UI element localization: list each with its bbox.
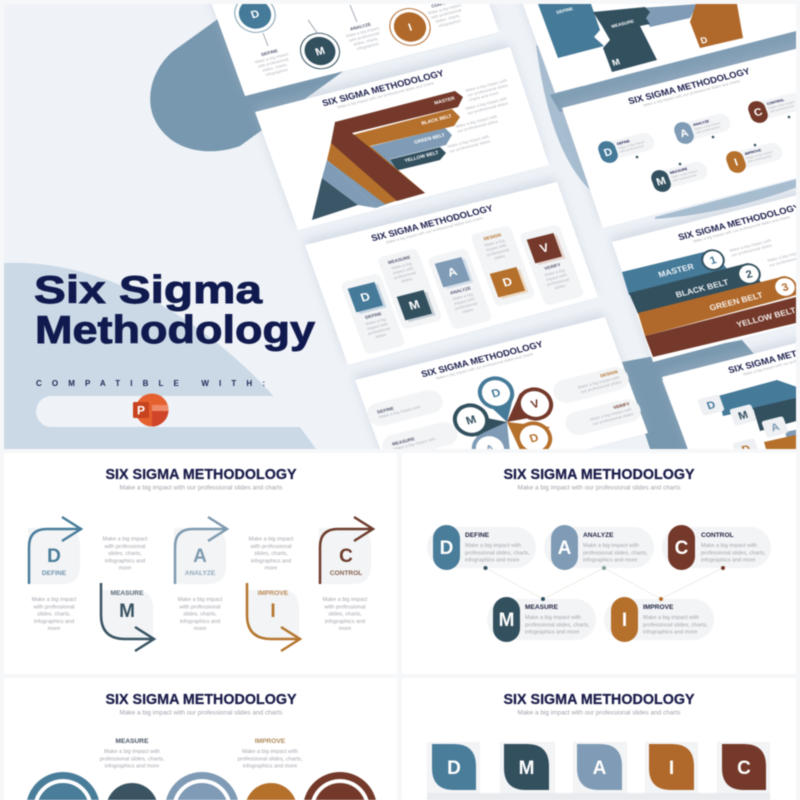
leaf C: C	[737, 758, 751, 779]
text blocks: with professional	[33, 604, 74, 610]
slide card: pyramid belts	[255, 47, 549, 230]
column design	[470, 225, 536, 307]
leaf D: D	[447, 758, 461, 779]
petal chart: A	[484, 443, 497, 456]
column V: Make a big	[544, 268, 565, 277]
belt labels: YELLOW BELT	[404, 150, 440, 164]
belt labels: BLACK BELT	[421, 113, 453, 127]
leaf D	[432, 744, 476, 790]
label: define	[254, 48, 289, 76]
steps	[718, 380, 800, 416]
compatibility pill	[36, 396, 336, 427]
side text: our professional slides	[456, 119, 499, 134]
text blocks: infographics and	[34, 619, 74, 625]
text blocks: slides, charts,	[108, 551, 142, 557]
text blocks: Make a big impact	[323, 597, 367, 603]
side text: our professional	[768, 256, 799, 268]
pill: design: our professional slides	[580, 379, 622, 394]
slide card: staircase	[662, 313, 800, 497]
column D	[340, 273, 406, 355]
column A: A	[446, 264, 459, 280]
capsule A: A	[678, 127, 690, 140]
label: control	[428, 3, 462, 28]
column design: D	[501, 274, 514, 290]
step C arrow: C	[339, 546, 353, 567]
column M	[377, 248, 443, 330]
label: control: slides, charts,	[435, 13, 461, 24]
step A arrow: A	[193, 546, 207, 567]
number badge 3	[771, 275, 799, 299]
panel: leaves slide	[402, 678, 796, 800]
column A: Make a big	[452, 292, 473, 301]
label: measure: professional slides, charts,	[100, 756, 165, 762]
number badge 1: 1	[708, 255, 718, 267]
step letter D	[697, 394, 725, 416]
text blocks: Make a big impact	[178, 597, 222, 603]
item measure: MEASURE	[525, 604, 559, 611]
label: measure: Make a big impact with	[104, 749, 160, 755]
side text: Make a big impact with	[465, 78, 508, 93]
number badge 2: 2	[744, 269, 754, 281]
pill: verify: Make a big impact with	[589, 407, 632, 422]
slide card: DMAIC circles	[202, 0, 499, 96]
capsule M: Make a big impact	[671, 169, 698, 179]
item control: C	[675, 538, 689, 559]
hero title: Six Sigma	[34, 269, 262, 312]
column A: slides	[462, 307, 474, 314]
capsule D: with professional	[619, 144, 644, 154]
capsule A	[672, 111, 734, 146]
ribbon labels: GREEN BELT	[708, 290, 765, 313]
pill: verify: VERIFY	[613, 401, 630, 410]
title: SIX SIGMA METHODOLOGY	[370, 203, 495, 243]
column D: professional	[367, 326, 391, 336]
label: improve: IMPROVE	[255, 738, 286, 745]
item measure: professional slides, charts,	[525, 622, 590, 628]
side text: our professional slides	[466, 83, 509, 98]
step I arrow: IMPROVE	[258, 590, 289, 597]
heading: SIX SIGMA METHODOLOGY	[106, 691, 296, 708]
heading: SIX SIGMA METHODOLOGY	[106, 466, 296, 483]
item control	[662, 525, 771, 570]
item define	[427, 525, 536, 570]
title: Make a big impact with our professional slides and charts	[436, 352, 534, 381]
side text: our professional slides	[448, 139, 491, 154]
text blocks: infographics and	[325, 619, 365, 625]
puzzle piece: dark: M	[611, 57, 621, 68]
capsule C	[746, 90, 800, 125]
item measure: infographics and more	[525, 630, 579, 636]
decorative strip: right steel shapes	[536, 28, 800, 449]
puzzle piece: orange	[690, 4, 743, 48]
circle I	[388, 7, 432, 47]
text blocks: infographics and	[251, 558, 291, 564]
label: improve: infographics and more	[243, 764, 297, 770]
column M: slides	[401, 276, 413, 284]
item measure	[487, 597, 596, 642]
capsule I	[724, 140, 786, 175]
item control: infographics and more	[701, 558, 755, 564]
subheading: Make a big impact with our professional slides and charts	[120, 484, 282, 492]
item improve	[604, 597, 714, 642]
item improve: professional slides, charts,	[643, 622, 708, 628]
label: measure	[100, 738, 165, 770]
label: analyze: ANALYZE	[349, 22, 372, 32]
slide card: belts ribbons	[612, 178, 800, 362]
title: SIX SIGMA METHODOLOGY	[420, 339, 545, 379]
step letter D2	[732, 438, 760, 460]
text blocks: slides, charts,	[183, 612, 217, 618]
column M: impact with	[392, 265, 415, 275]
label: improve: professional slides, charts,	[238, 756, 303, 762]
text blocks: infographics and	[180, 619, 220, 625]
step letter D: D	[705, 399, 717, 412]
capsule I: IMPROVE	[744, 148, 762, 156]
step M arrow	[101, 583, 154, 651]
column V: VERIFY	[544, 262, 561, 271]
slide card: petals	[354, 312, 648, 450]
number badge 3: 3	[780, 282, 790, 294]
step M arrow: MEASURE	[111, 590, 144, 597]
column design: DESIGN	[483, 232, 502, 241]
leaf backgrounds	[427, 742, 770, 800]
pyramid	[312, 91, 463, 220]
step letter D2: D	[740, 443, 752, 456]
hero title: Methodology	[35, 309, 315, 352]
heading: SIX SIGMA METHODOLOGY	[504, 466, 694, 483]
side text	[729, 238, 800, 268]
column D: Make a big	[365, 317, 386, 326]
capsule M	[649, 159, 711, 194]
ribbon labels: YELLOW BELT	[735, 305, 798, 329]
side text: our professional slides	[466, 101, 509, 116]
capsule I: Make a big impact	[746, 150, 773, 160]
column V: impact with	[545, 272, 568, 282]
step letter M: M	[737, 409, 750, 422]
item define: infographics and more	[465, 558, 519, 564]
slide card: DMADV squares	[305, 182, 598, 365]
title: Make a big impact with our professional slides and charts	[386, 216, 484, 245]
puzzle piece: steel	[538, 4, 604, 58]
step A arrow: ANALYZE	[185, 570, 216, 577]
step letter A: A	[769, 421, 781, 434]
label: define: slides, charts,	[262, 62, 288, 73]
decorative blob: light blue	[4, 263, 316, 449]
label: analyze: Make a big impact	[345, 25, 380, 38]
side text: Make a big impact with	[455, 114, 498, 129]
pill: design: Make a big impact with	[577, 375, 620, 390]
leaf A	[577, 744, 622, 790]
item improve: I	[622, 610, 627, 631]
label: improve: Make a big impact with	[242, 749, 298, 755]
label: define: Make a big impact	[254, 51, 289, 64]
pill: measure: MEASURE	[391, 436, 415, 447]
ribbon labels	[657, 261, 798, 329]
label: measure: infographics and more	[105, 764, 159, 770]
pill: design: DESIGN	[600, 369, 618, 378]
item define: Make a big impact with	[465, 543, 521, 549]
capsule A: Make a big impact	[694, 121, 721, 131]
connectors	[263, 5, 357, 46]
item analyze: professional slides, charts,	[583, 550, 648, 556]
title: Make a big impact with our professional slides and charts	[693, 215, 791, 244]
side text: our professional slides	[730, 243, 773, 258]
text blocks: more	[48, 626, 60, 632]
capsule I: I	[733, 157, 740, 169]
item analyze: infographics and more	[583, 558, 637, 564]
title: SIX SIGMA METHODOLOGY	[627, 66, 752, 106]
icon: PowerPoint: P	[137, 404, 145, 418]
label: control: with professional	[430, 7, 462, 20]
title: Make a big impact with our professional slides and charts	[643, 79, 741, 108]
heading: SIX SIGMA METHODOLOGY	[504, 691, 694, 708]
side text: Make a big impact with	[729, 238, 772, 253]
step letter M	[729, 404, 757, 426]
column D: D	[359, 289, 372, 305]
capsule C: C	[752, 106, 764, 119]
step A arrow	[174, 517, 227, 584]
subheading: Make a big impact with our professional slides and charts	[518, 484, 680, 492]
column A	[427, 248, 493, 330]
capsule D: D	[602, 146, 614, 159]
item improve: Make a big impact with	[643, 615, 699, 621]
item improve: IMPROVE	[643, 604, 674, 611]
capsule C: CONTROL	[766, 98, 786, 106]
connector dots	[636, 116, 790, 165]
text blocks: slides, charts,	[254, 551, 288, 557]
circle D	[234, 3, 276, 34]
circle D: D	[249, 8, 261, 21]
item analyze: Make a big impact with	[583, 543, 639, 549]
text blocks: more	[194, 626, 206, 632]
column D: slides	[375, 332, 387, 339]
label: define: with professional	[257, 56, 289, 69]
puzzle piece: light	[640, 4, 698, 27]
text blocks: Make a big impact	[103, 536, 147, 542]
circle row	[27, 772, 376, 800]
text blocks	[32, 536, 368, 632]
column V: V	[538, 240, 552, 255]
leaf C	[722, 744, 766, 790]
subheading: Make a big impact with our professional slides and charts	[518, 710, 680, 716]
title: SIX SIGMA METHODOLOGY	[677, 202, 800, 242]
capsule M: with professional	[672, 173, 697, 183]
label: measure: MEASURE	[116, 738, 149, 745]
text blocks: more	[119, 566, 131, 572]
leaf I: I	[669, 758, 674, 779]
column design: professional	[486, 247, 510, 257]
step I arrow: I	[270, 601, 276, 622]
column D: DEFINE	[364, 311, 382, 320]
column M: MEASURE	[387, 255, 411, 265]
panel: circles slide	[4, 678, 397, 800]
petal chart: D	[490, 387, 502, 400]
puzzle piece: orange: D	[699, 35, 709, 46]
petal chart: M	[465, 414, 478, 428]
leaf A: A	[593, 758, 607, 779]
circle I: I	[407, 22, 414, 34]
label: define: infographics	[265, 67, 288, 77]
puzzle piece: dark	[593, 7, 657, 72]
petal chart: V	[529, 398, 541, 411]
label: define: DEFINE	[260, 48, 279, 57]
label: analyze: with professional	[348, 30, 380, 43]
title: SIX SIGMA METHODOLOGY	[321, 68, 446, 108]
capsule C: Make a big impact	[768, 100, 795, 110]
label: analyze: slides, charts,	[353, 36, 379, 47]
pill: define	[368, 390, 442, 426]
panel: capsules slide	[402, 453, 796, 674]
circle M: M	[314, 45, 327, 58]
text blocks: more	[265, 566, 277, 572]
pill: define: Make a big impact with	[378, 404, 422, 419]
belt labels	[404, 96, 456, 164]
belt labels: MASTER	[434, 96, 456, 106]
column M: Make a big	[391, 261, 412, 271]
petal chart: D	[528, 432, 540, 445]
item analyze: A	[558, 538, 572, 559]
step I arrow	[247, 583, 300, 651]
pill: measure: Make a big impact with	[393, 436, 437, 451]
side text: Make a big impact with	[447, 134, 490, 149]
item control: CONTROL	[701, 532, 734, 539]
text blocks: with professional	[250, 544, 291, 550]
text blocks: Make a big impact	[249, 536, 293, 542]
column D: impact with	[366, 321, 389, 331]
step letter A	[761, 416, 789, 438]
item control: Make a big impact with	[701, 543, 757, 549]
item define: D	[440, 538, 453, 559]
item analyze: ANALYZE	[583, 532, 614, 539]
column V: slides	[554, 283, 566, 290]
puzzle piece: steel: DEFINE	[556, 6, 574, 15]
column A: professional	[454, 301, 478, 311]
column M: professional	[393, 270, 417, 280]
column design: Make a big	[484, 238, 505, 248]
column A: ANALYZE	[449, 286, 472, 295]
puzzle piece: dark: MEASURE	[611, 19, 635, 29]
column V	[519, 224, 585, 306]
text blocks: Make a big impact	[32, 597, 76, 603]
step M arrow: M	[119, 601, 135, 622]
capsule A: ANALYZE	[692, 119, 710, 127]
column A: impact with	[453, 296, 476, 306]
item analyze	[544, 525, 654, 570]
pill: verify: our professional slides	[592, 411, 634, 426]
slide card: puzzle	[512, 0, 800, 93]
capsule D	[596, 130, 658, 165]
leaf I	[649, 744, 694, 790]
step D arrow	[28, 517, 81, 584]
column V: professional	[546, 277, 570, 287]
column design: slides	[494, 253, 506, 261]
text blocks: more	[339, 626, 351, 632]
capsule I: with professional	[747, 154, 772, 164]
panel: hero cover	[4, 3, 797, 450]
label: improve	[238, 738, 303, 770]
leaf M	[504, 744, 549, 790]
text blocks: infographics and	[105, 558, 145, 564]
item control: professional slides, charts,	[701, 550, 766, 556]
capsule A: with professional	[695, 125, 720, 135]
label: control: Make a big impact	[427, 2, 462, 15]
decorative blob: steel blue	[150, 16, 345, 151]
item measure: Make a big impact with	[525, 615, 581, 621]
number badge 1	[699, 248, 727, 272]
side text: Make a big impact with	[465, 96, 508, 111]
step C arrow	[319, 517, 373, 584]
item define: professional slides, charts,	[465, 550, 530, 556]
title: Make a big impact with our professional slides and charts	[337, 81, 435, 110]
petal chart	[452, 376, 554, 450]
item define: DEFINE	[465, 532, 490, 539]
circle M	[299, 32, 341, 70]
pill: measure	[382, 422, 458, 450]
column design: impact with	[485, 242, 508, 252]
text blocks: slides, charts,	[328, 612, 362, 618]
slide card: DMAIC capsules	[562, 44, 800, 228]
capsule D: DEFINE	[616, 139, 631, 146]
item measure: M	[499, 610, 514, 631]
capsule M: MEASURE	[669, 167, 689, 175]
text blocks: with professional	[324, 604, 365, 610]
pill: define: DEFINE	[376, 406, 395, 415]
number badge 2	[735, 262, 763, 286]
label: analyze: infographics	[356, 41, 379, 51]
text blocks: with professional	[104, 544, 145, 550]
ribbon labels: MASTER	[657, 261, 695, 279]
ribbons	[622, 250, 728, 295]
leaf M: M	[519, 758, 534, 779]
text blocks: slides, charts,	[37, 612, 71, 618]
step D arrow: DEFINE	[42, 570, 67, 577]
compatible label: COMPATIBLE WITH:	[36, 379, 265, 388]
step C arrow: CONTROL	[330, 570, 362, 577]
item improve: infographics and more	[643, 630, 697, 636]
capsule D: Make a big impact	[618, 140, 645, 150]
pill: design	[554, 367, 630, 403]
side text: charts and more	[468, 90, 500, 102]
hero title	[34, 269, 315, 352]
text blocks: with professional	[179, 604, 220, 610]
capsule M: M	[655, 175, 668, 188]
label: control: infographics	[438, 18, 461, 28]
ribbon labels: BLACK BELT	[674, 277, 731, 300]
pill: verify	[566, 399, 642, 435]
icon: PowerPoint	[133, 394, 170, 429]
belt labels: GREEN BELT	[413, 132, 446, 146]
column M: M	[407, 297, 422, 313]
step D arrow: D	[47, 546, 61, 567]
subheading: Make a big impact with our professional slides and charts	[120, 710, 282, 716]
panel: curved arrows slide	[4, 453, 397, 674]
label: analyze	[346, 22, 380, 50]
side text	[447, 78, 512, 154]
capsule C: with professional	[769, 104, 794, 114]
